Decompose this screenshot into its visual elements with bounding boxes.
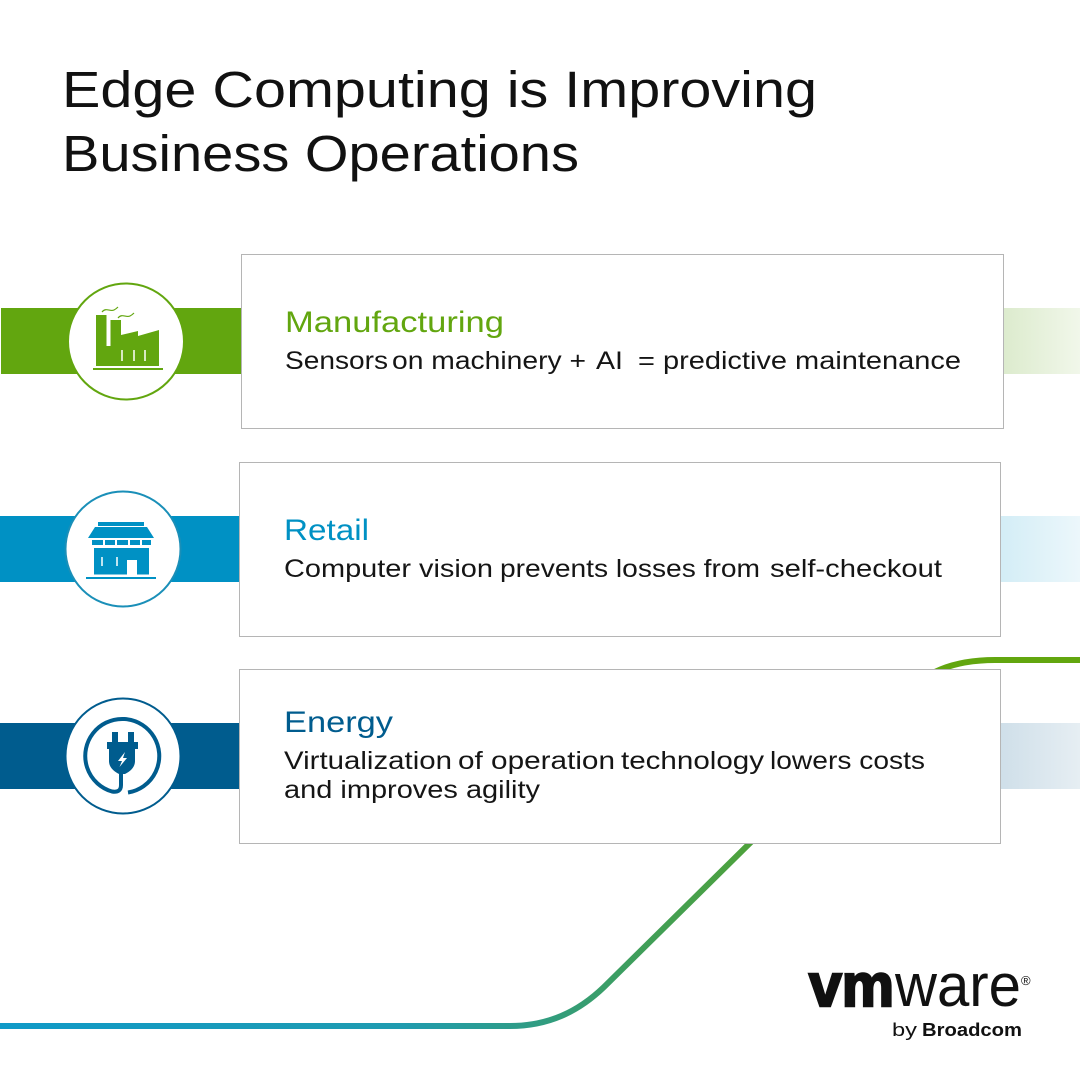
- connector line: [0, 660, 1080, 1026]
- title: [62, 61, 817, 182]
- manufacturing heading: Manufacturing: [285, 306, 504, 339]
- energy left band: [0, 723, 240, 789]
- icon: power plug: [66, 698, 180, 814]
- logo: vmware by Broadcom: vm: [809, 952, 894, 1019]
- retail left band: [0, 516, 240, 582]
- panel: energy: [0, 670, 1080, 844]
- manufacturing right band: [1003, 308, 1080, 374]
- retail text: [284, 555, 942, 583]
- title: Edge Computing is Improving: [62, 61, 817, 118]
- retail text: prevents losses from: [500, 555, 760, 583]
- logo: vmware by Broadcom: by: [892, 1020, 917, 1040]
- energy right band: [1000, 723, 1080, 789]
- logo: vmware by Broadcom: ®: [1021, 973, 1031, 988]
- logo: vmware by Broadcom: [809, 952, 1031, 1040]
- manufacturing card: [242, 254, 1004, 428]
- energy text: technology: [621, 747, 765, 775]
- icon: storefront: [66, 492, 180, 606]
- energy text: of operation: [458, 747, 615, 775]
- retail right band: [1000, 516, 1080, 582]
- manufacturing left band: [1, 308, 242, 374]
- manufacturing text: Sensors: [285, 347, 388, 375]
- energy heading: Energy: [284, 706, 393, 739]
- manufacturing text: on machinery +: [392, 347, 586, 375]
- manufacturing text: AI: [596, 347, 623, 375]
- energy text: Virtualization: [284, 747, 452, 775]
- panel: manufacturing: [1, 254, 1080, 428]
- icon: factory: [68, 284, 184, 400]
- manufacturing text: [285, 347, 961, 375]
- retail heading: Retail: [284, 514, 369, 547]
- panel: retail: [0, 462, 1080, 636]
- retail text: Computer vision: [284, 555, 493, 583]
- retail text: self-checkout: [770, 555, 942, 583]
- energy text: and improves agility: [284, 776, 541, 804]
- logo: vmware by Broadcom: ware: [894, 952, 1021, 1019]
- manufacturing text: = predictive maintenance: [638, 347, 961, 375]
- logo: vmware by Broadcom: Broadcom: [922, 1020, 1022, 1040]
- retail card: [240, 462, 1000, 636]
- energy card: [240, 670, 1000, 844]
- energy text: lowers costs: [770, 747, 925, 775]
- energy text: [284, 747, 925, 804]
- title: Business Operations: [62, 125, 579, 182]
